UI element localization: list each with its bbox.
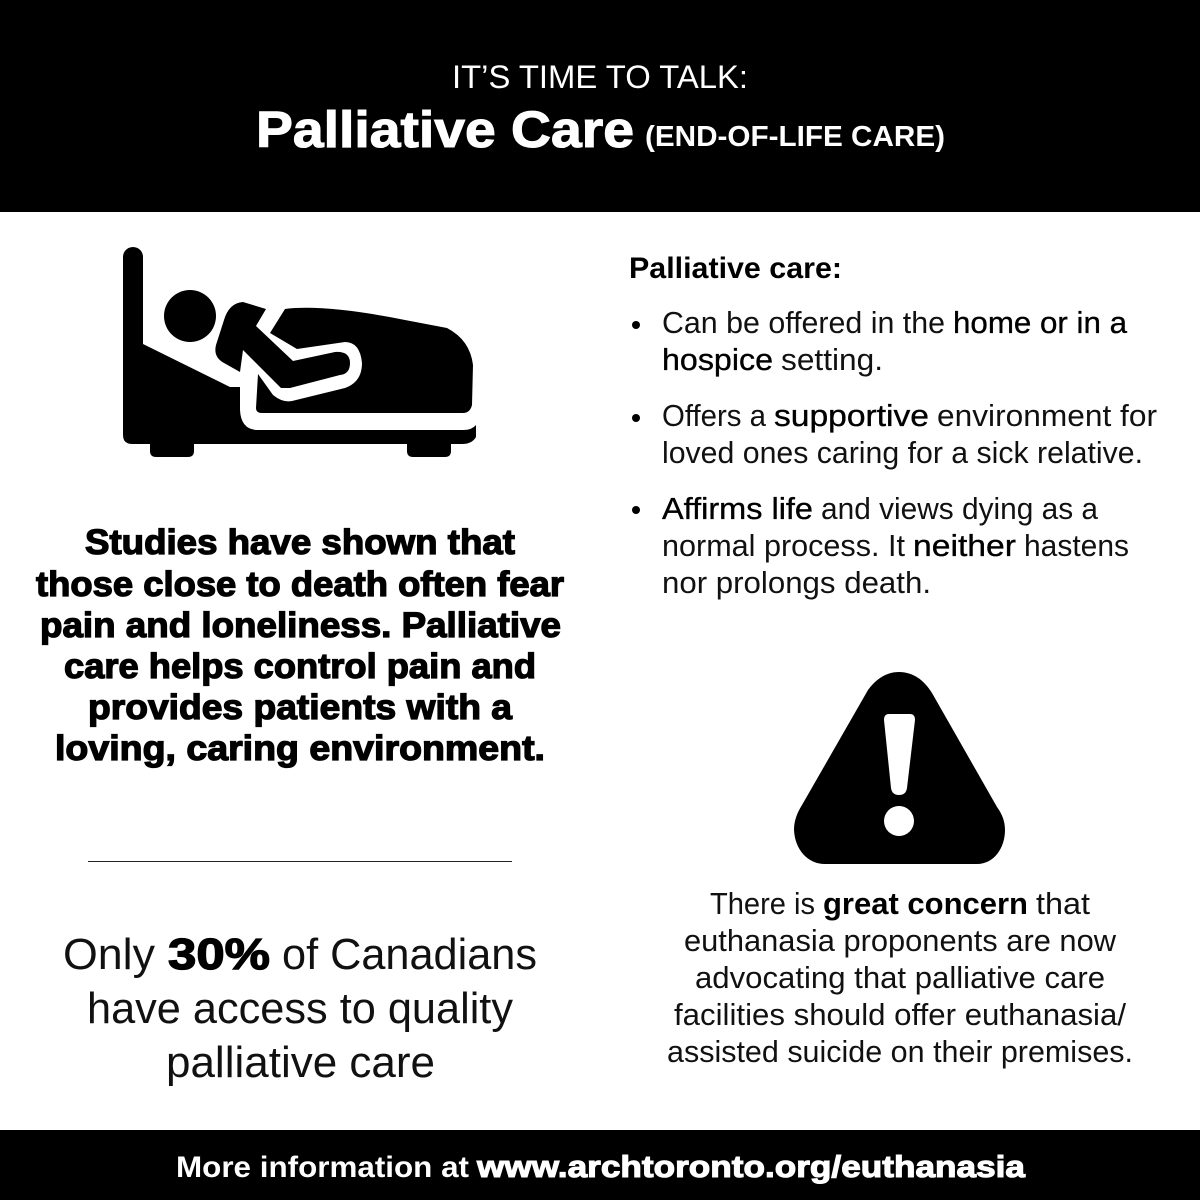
bullet: affirms life: and views dying as a <box>821 491 1099 526</box>
left statement: fear of pain and loneliness: loving, caring environment. <box>55 729 545 768</box>
concern statement: euthanasia proponents are now <box>684 923 1117 958</box>
left statement: fear of pain and loneliness: care helps control pain and <box>64 647 536 686</box>
concern statement: great concern <box>823 886 1028 921</box>
left statement: fear of pain and loneliness: those close to death often fear <box>36 565 564 604</box>
bullet: supportive environment <box>632 398 1157 470</box>
statistic: 30% of Canadians: of Canadians <box>282 930 537 979</box>
bullet: home or hospice: home or in a <box>953 305 1128 340</box>
panel: palliative care facts <box>629 252 1157 600</box>
statistic: 30% of Canadians: Only <box>63 930 155 979</box>
bullet: supportive environment: Offers a <box>662 398 767 433</box>
footer link text <box>176 1149 1026 1184</box>
footer link text: www.archtoronto.org/euthanasia <box>476 1149 1026 1184</box>
kicker: it's time to talk: IT’S TIME TO TALK: <box>452 59 748 95</box>
bullet: supportive environment: loved ones caring for a sick relative. <box>662 435 1143 470</box>
icon: warning triangle <box>794 672 1005 864</box>
concern statement: facilities should offer euthanasia/ <box>674 997 1126 1032</box>
left statement: fear of pain and loneliness: Studies have shown that <box>85 523 515 562</box>
footer link text: More information at <box>176 1151 469 1184</box>
left statement: fear of pain and loneliness: pain and loneliness. Palliative <box>40 606 561 645</box>
bullet: affirms life: hastens <box>1024 528 1129 563</box>
bullet: affirms life: normal process. It <box>662 528 905 563</box>
concern statement <box>667 886 1133 1069</box>
bullet: affirms life: nor prolongs death. <box>662 565 931 600</box>
left statement: fear of pain and loneliness: provides patients with a <box>88 688 513 727</box>
bullet: home or hospice: Can be offered in the <box>662 305 945 340</box>
bullet: affirms life: Affirms life <box>662 491 813 526</box>
bullet: home or hospice <box>632 305 1128 377</box>
title <box>256 101 945 158</box>
statistic: 30% of Canadians: have access to quality <box>87 984 513 1033</box>
concern statement: that <box>1036 886 1090 921</box>
statistic: 30% of Canadians: palliative care <box>166 1038 435 1087</box>
title: Palliative Care <box>256 101 634 158</box>
left statement: fear of pain and loneliness <box>36 523 564 768</box>
title: (END-OF-LIFE CARE) <box>645 121 945 153</box>
bullet: supportive environment: supportive <box>774 398 929 433</box>
concern statement: assisted suicide on their premises. <box>667 1034 1133 1069</box>
bullet: home or hospice: setting. <box>781 342 883 377</box>
concern statement: There is <box>710 886 815 921</box>
statistic: 30% of Canadians: 30% <box>168 930 270 979</box>
footer band <box>0 1130 1200 1200</box>
statistic: 30% of Canadians <box>63 930 537 1087</box>
bullet: home or hospice: hospice <box>662 342 773 377</box>
facts heading: Palliative care: <box>629 252 842 285</box>
header band <box>0 0 1200 212</box>
bullet: affirms life <box>632 491 1129 600</box>
concern statement: advocating that palliative care <box>695 960 1105 995</box>
bullet: supportive environment: environment for <box>937 398 1157 433</box>
bullet: affirms life: neither <box>913 528 1016 563</box>
icon: person in bed <box>123 247 476 457</box>
